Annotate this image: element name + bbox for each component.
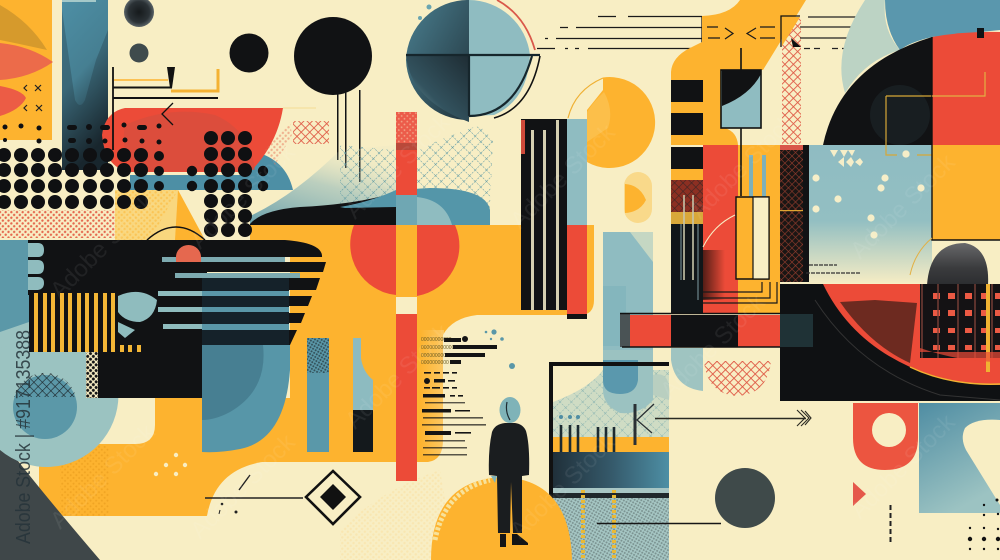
shape: yellow semicircle with halftone edge [431,477,572,560]
diagonal watermarks: Adobe Stock [340,318,456,434]
bar: horizontal red black teal band [620,282,813,347]
icons: black circles [230,17,372,182]
diagonal watermarks: Adobe Stock [845,148,961,264]
panel: tall blue gradient bar [62,0,108,170]
text block: dash lines beside person [421,336,497,456]
icon: square with diagonal blue and black [721,70,761,128]
bar: blue and black notched bar [353,338,373,452]
panel: large yellow field [39,225,594,516]
figure: standing person [489,397,529,547]
stock watermark ID text: Adobe Stock | #917135388 [13,330,35,544]
icon: diamond with line [205,471,360,524]
shape: quartered halftone circle [406,0,540,122]
halftone: faint yellow dots at bottom centre [340,470,450,560]
shape: red dome [102,103,316,172]
shape: blue block with cream heart [919,403,1000,513]
bar: central red vertical bar [396,112,417,481]
panel: big black right block with red bowl [780,284,1000,401]
icon: small red triangle [853,482,866,506]
chart: black column with cream stripes [521,119,587,319]
column: salmon lattice with corner box [781,16,801,144]
wave: teal hatched hill with black wedge [250,125,493,225]
diagonal watermarks: Adobe Stock [505,118,621,234]
text block: dash lines beside person: 00000000000 [421,337,452,343]
text block: dash lines beside person: 00000000000000 [421,345,460,351]
panel: red and yellow squares [932,28,1000,240]
panel: pale blue vertical block [603,232,669,413]
line: horizontal line to circle [597,522,721,524]
line: vertical dot dash [890,505,892,543]
panel: left blue block and black blocks [0,240,202,398]
icon: dark halftone circle [715,468,775,528]
panel: blue arc behind red dome [115,150,300,241]
line group: black and yellow bracket lines [113,67,218,150]
shape: yellow circle with arc [568,77,655,168]
panel: top-left yellow card [0,0,53,140]
diagonal watermarks: Adobe Stock [45,188,161,304]
text block: dash lines beside person: 000000000 [421,353,446,359]
panel: red and yellow columns with box [703,48,780,313]
shape: teal top blobs [841,0,1000,93]
lines: horizontal dashes top [537,16,702,49]
shape: yellow pill [624,172,652,223]
diagonal watermarks: Adobe Stock [685,108,801,224]
diagonal watermarks: Adobe Stock [845,408,961,524]
bar: small blue gradient bar [307,338,329,452]
diagonal watermarks [45,108,961,544]
icons: halftone top circles [124,0,154,62]
chart: yellow and black vertical stripes [29,293,141,352]
diagonal watermarks: Adobe Stock [185,428,301,544]
diagonal watermarks: Adobe Stock [505,428,621,544]
shape: salmon lattice half disc [704,361,771,396]
diagonal watermarks: Adobe Stock [655,288,771,404]
diagonal watermarks: Adobe Stock [45,418,161,534]
diagonal watermarks: Adobe Stock [185,138,301,254]
panel: frame scene background [553,370,669,560]
shape: large blue tongue [202,345,290,452]
diagonal watermarks: Adobe Stock [340,108,456,224]
lines: dashes right of column [800,17,880,48]
chart: halftone dot grid [0,122,268,237]
frame: black outline and posts [551,364,669,560]
shape: black quarter circle [823,37,932,158]
panel: pale blue speckled square [809,145,932,283]
icons: blue dots above person [485,329,515,369]
chevrons: beside centre line [707,27,775,39]
arrow: long line with chevrons [655,410,811,426]
shape: pale blue quarter [671,348,703,391]
dots: bottom right [968,498,1000,550]
panel: yellow column with black rects [671,0,806,313]
shape: light blue ring with inner circle [0,323,118,467]
shape: red pill with cream circle [853,403,918,470]
shape: red circle with blue top [350,197,459,296]
patch: salmon crosshatch top [265,121,329,165]
graphic: black machine with striped bars [117,227,326,345]
shape: dark grain triangle [0,438,100,560]
panel: dark hatched column [780,145,809,282]
text block: dash lines beside person: 0000000000 [421,360,449,366]
band: salmon halftone strip [0,210,115,238]
shape: grey gradient dome [806,238,988,285]
